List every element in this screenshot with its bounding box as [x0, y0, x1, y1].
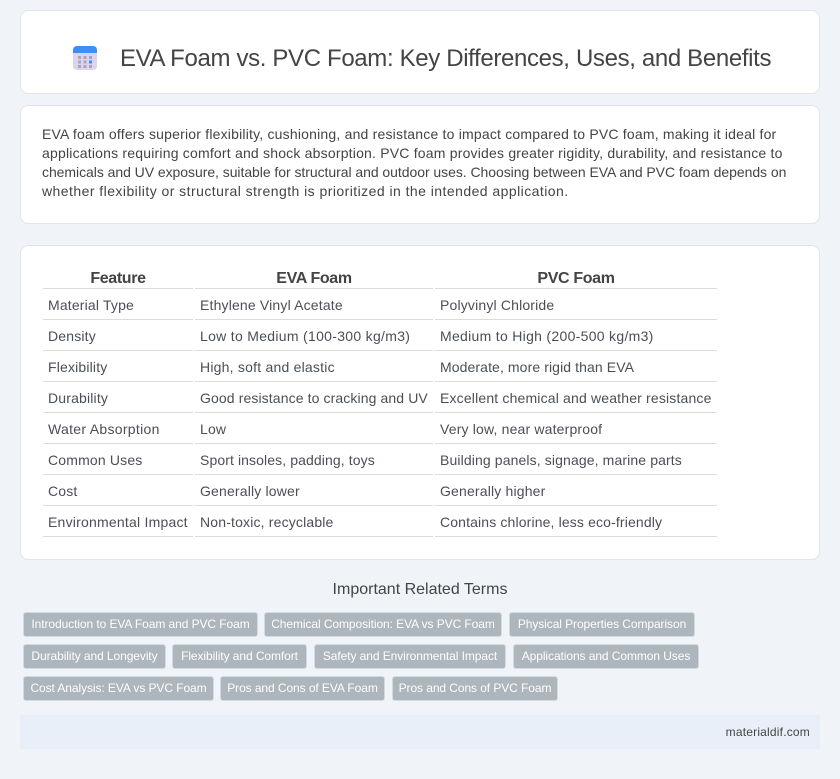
- comparison table: Generally higher: [440, 483, 545, 499]
- related term tags: Safety and Environmental Impact: [323, 649, 497, 663]
- comparison table: Durability: [48, 390, 108, 406]
- table panel: [20, 245, 820, 560]
- comparison table: Density: [48, 328, 96, 344]
- comparison table: Sport insoles, padding, toys: [200, 452, 375, 468]
- related term tags: Introduction to EVA Foam and PVC Foam: [31, 617, 250, 631]
- comparison table: Polyvinyl Chloride: [440, 297, 554, 313]
- intro text: EVA foam offers superior flexibility, cushioning, and resistance to impact compared to PVC foam, making it ideal for: [42, 126, 776, 142]
- footer bar: [20, 715, 820, 749]
- related term tags: Pros and Cons of PVC Foam: [399, 681, 551, 695]
- comparison table: Generally lower: [200, 483, 300, 499]
- comparison table: Low to Medium (100-300 kg/m3): [200, 328, 410, 344]
- title: EVA Foam vs. PVC Foam: Key Differences, Uses, and Benefits: [120, 45, 771, 72]
- comparison table: Common Uses: [48, 452, 142, 468]
- comparison table: Very low, near waterproof: [440, 421, 602, 437]
- comparison table: Flexibility: [48, 359, 107, 375]
- comparison table: High, soft and elastic: [200, 359, 335, 375]
- icon: calendar: [73, 46, 97, 70]
- comparison table: Good resistance to cracking and UV: [200, 390, 428, 406]
- comparison table: Ethylene Vinyl Acetate: [200, 297, 343, 313]
- related term tags: [23, 612, 699, 701]
- comparison table: Contains chlorine, less eco-friendly: [440, 514, 662, 530]
- table header: Feature: [90, 270, 146, 287]
- intro panel: [20, 105, 820, 224]
- comparison table: EVA Foam: [276, 270, 352, 287]
- related term tags: Chemical Composition: EVA vs PVC Foam: [271, 617, 495, 631]
- intro text: [42, 126, 786, 199]
- related term tags: Cost Analysis: EVA vs PVC Foam: [30, 681, 207, 695]
- related terms heading: Important Related Terms: [333, 581, 507, 598]
- comparison table: Cost: [48, 483, 77, 499]
- comparison table: Environmental Impact: [48, 514, 188, 530]
- comparison table: PVC Foam: [537, 270, 615, 287]
- comparison table: Water Absorption: [48, 421, 160, 437]
- related term tags: Flexibility and Comfort: [181, 649, 298, 663]
- header panel: [20, 10, 820, 94]
- related term tags: Physical Properties Comparison: [518, 617, 686, 631]
- comparison table: Material Type: [48, 297, 134, 313]
- intro text: applications requiring comfort and shock absorption. PVC foam provides greater rigidity, durability, and resistance to: [42, 145, 783, 161]
- footer source text: materialdif.com: [726, 725, 810, 739]
- related term tags: Durability and Longevity: [31, 649, 158, 663]
- related term tags: Applications and Common Uses: [522, 649, 690, 663]
- comparison table: Excellent chemical and weather resistance: [440, 390, 712, 406]
- comparison table: Medium to High (200-500 kg/m3): [440, 328, 654, 344]
- intro text: chemicals and UV exposure, suitable for structural and outdoor uses. Choosing between EVA and PVC foam depends on: [42, 164, 786, 180]
- comparison table: Low: [200, 421, 226, 437]
- intro text: whether flexibility or structural strength is prioritized in the intended application.: [42, 183, 569, 199]
- comparison table: Building panels, signage, marine parts: [440, 452, 682, 468]
- related term tags: Pros and Cons of EVA Foam: [227, 681, 378, 695]
- comparison table: Moderate, more rigid than EVA: [440, 359, 634, 375]
- comparison table: Non-toxic, recyclable: [200, 514, 334, 530]
